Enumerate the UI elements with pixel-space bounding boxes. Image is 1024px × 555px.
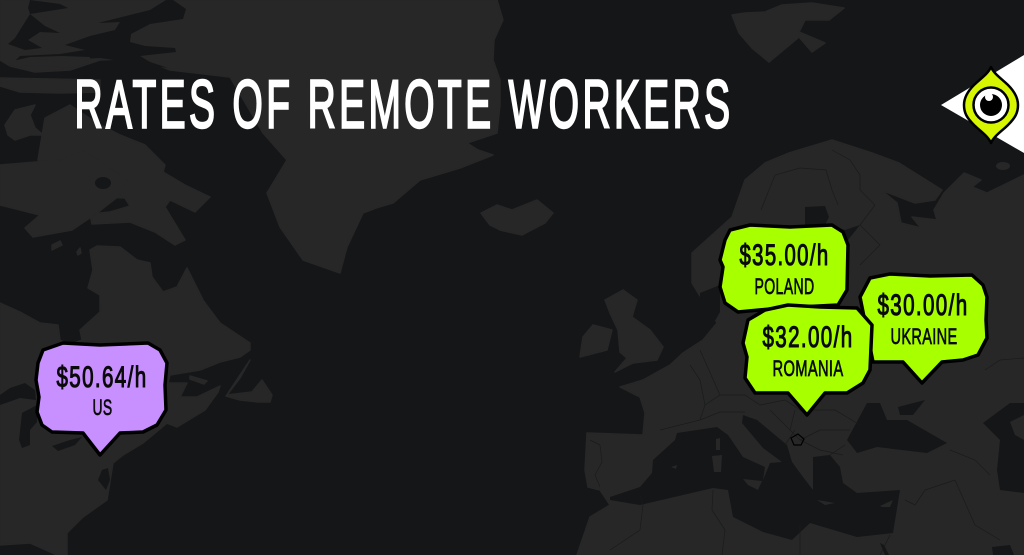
callout: US: [36, 343, 167, 455]
Romania rate: $32.00/h: [762, 321, 854, 354]
US label: US: [92, 395, 112, 420]
Poland label: POLAND: [754, 274, 814, 299]
Poland rate: $35.00/h: [740, 239, 830, 272]
Romania label: ROMANIA: [772, 356, 844, 381]
Ukraine rate: $30.00/h: [878, 289, 968, 322]
callout: Ukraine: [860, 274, 987, 383]
callout: Poland: [720, 225, 848, 312]
callout: Romania: [743, 305, 872, 415]
US rate: $50.64/h: [56, 361, 148, 394]
Ukraine label: UKRAINE: [890, 324, 958, 349]
logo: eye on white triangle: [941, 55, 1024, 153]
